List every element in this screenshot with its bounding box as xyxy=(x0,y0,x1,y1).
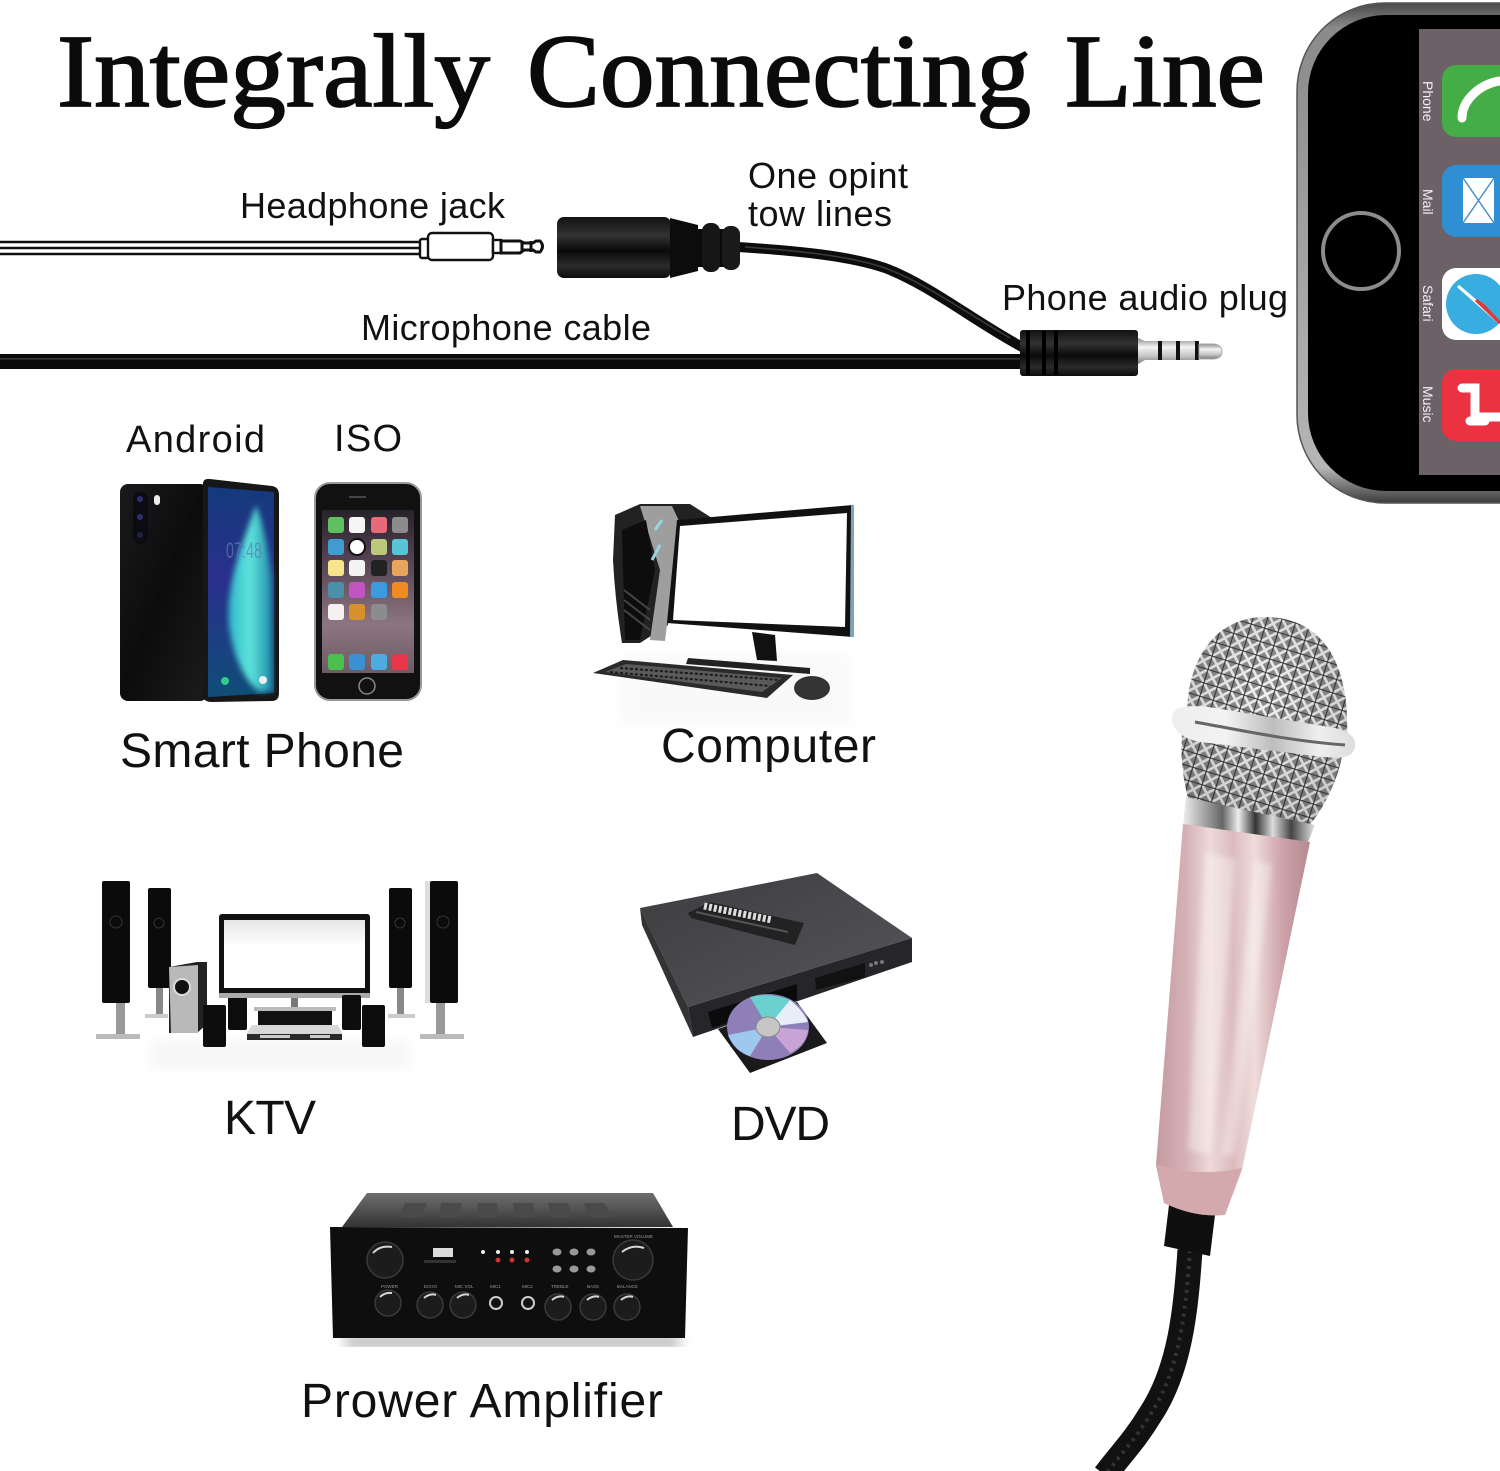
label: iso: ISO xyxy=(334,418,402,460)
phone screen: Phone xyxy=(1420,81,1436,122)
right satellites xyxy=(342,995,385,1047)
dvd player xyxy=(640,873,912,1073)
app grid xyxy=(328,517,408,670)
app icon: mail xyxy=(1442,165,1500,237)
amp knobs xyxy=(367,1240,653,1320)
title: Connecting xyxy=(527,14,1031,129)
amp panel legends xyxy=(381,1234,653,1289)
label: microphone cable: Microphone cable xyxy=(361,307,651,348)
amp leds xyxy=(481,1250,530,1262)
label: one point two lines: tow lines xyxy=(748,193,892,234)
title: Line xyxy=(1065,14,1265,129)
microphone cable xyxy=(1105,1250,1190,1471)
microphone cable xyxy=(0,354,1024,369)
amp panel legends: BALANCE xyxy=(617,1284,638,1289)
label: computer: Computer xyxy=(661,720,876,773)
amp panel legends: TREBLE xyxy=(551,1284,569,1289)
phone screen: Safari xyxy=(1420,285,1436,322)
3.5mm phone audio plug xyxy=(1020,330,1222,376)
app icon: safari xyxy=(1442,268,1500,340)
microphone body xyxy=(1156,824,1310,1216)
right floor speakers xyxy=(388,881,464,1039)
black split socket and branch cable xyxy=(557,217,1024,348)
monitor xyxy=(667,505,854,674)
amp panel legends: MIC2 xyxy=(522,1284,533,1289)
microphone collar xyxy=(1183,797,1315,842)
computer tower xyxy=(613,504,712,643)
label: dvd: DVD xyxy=(731,1098,830,1151)
label: smart phone: Smart Phone xyxy=(120,725,404,778)
amp panel legends: BASS xyxy=(587,1284,599,1289)
microphone strain relief xyxy=(1164,1205,1215,1256)
amp vents xyxy=(400,1203,613,1217)
label: headphone jack: Headphone jack xyxy=(240,185,506,226)
remote control xyxy=(688,902,804,945)
label: android: Android xyxy=(126,419,265,461)
amp panel legends: MASTER VOLUME xyxy=(614,1234,653,1239)
ktv home theatre system xyxy=(96,881,464,1070)
microphone grille xyxy=(1181,617,1347,830)
amp panel legends: MIC1 xyxy=(490,1284,501,1289)
title: Integrally xyxy=(57,14,490,129)
label: one point two lines: One opint xyxy=(748,155,908,196)
phone home button xyxy=(1323,213,1399,289)
label: power amplifier: Prower Amplifier xyxy=(301,1375,663,1428)
iphone xyxy=(315,483,421,700)
label: one point two lines xyxy=(748,155,908,234)
left satellites xyxy=(203,995,247,1047)
label: phone audio plug: Phone audio plug xyxy=(1002,277,1288,318)
centre speaker and player xyxy=(247,1007,342,1040)
amp mic jacks xyxy=(490,1297,534,1309)
label: ktv: KTV xyxy=(224,1092,316,1145)
phone screen: Mail xyxy=(1420,189,1436,215)
dvd chassis xyxy=(640,873,912,1037)
disc tray and disc xyxy=(718,994,827,1073)
amp panel legends: POWER xyxy=(381,1284,399,1289)
desktop computer xyxy=(593,504,854,725)
tv screen xyxy=(219,914,370,1008)
power amplifier xyxy=(330,1193,688,1346)
phone screen: Music xyxy=(1420,386,1436,423)
app icon: music xyxy=(1442,369,1500,441)
android smartphone xyxy=(120,479,279,702)
amp panel legends: MIC VOL xyxy=(455,1284,474,1289)
headphone wire and plug outline xyxy=(0,233,542,260)
amp buttons xyxy=(552,1248,596,1272)
karaoke microphone xyxy=(1105,617,1355,1471)
amp panel legends: ECHO xyxy=(424,1284,438,1289)
android smartphone: 07:48 xyxy=(226,538,262,563)
left floor speakers xyxy=(96,881,171,1039)
microphone ring xyxy=(1172,706,1355,758)
amp usb and sd slot xyxy=(424,1248,456,1263)
app icon: phone xyxy=(1442,65,1500,137)
large phone close-up xyxy=(1297,3,1500,503)
phone screen xyxy=(1419,29,1500,475)
subwoofer xyxy=(169,962,207,1033)
keyboard xyxy=(593,660,793,698)
mouse xyxy=(794,676,830,700)
title xyxy=(57,14,1265,129)
